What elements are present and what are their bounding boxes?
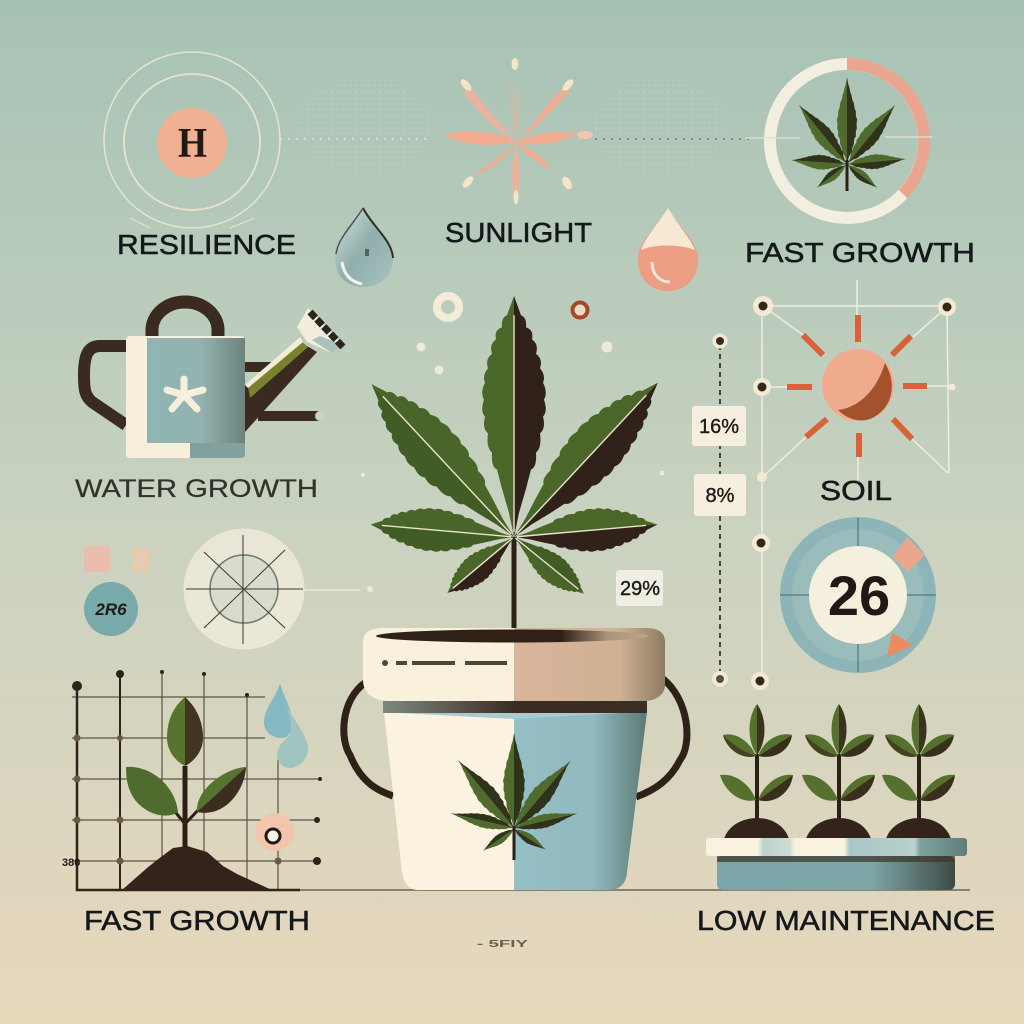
icon: resilience circle: [104, 52, 432, 228]
chart: growth grid with seedling: [62, 670, 322, 890]
label: fast growth bottom: FAST GROWTH: [84, 905, 310, 936]
callout: center 29%: 29%: [620, 578, 660, 600]
pot body: [383, 701, 647, 890]
icon: leaf in circle: [745, 64, 932, 218]
footer faint text: - 5FIY: [477, 939, 529, 950]
label: resilience: RESILIENCE: [117, 229, 296, 260]
chart: growth grid with seedling: 380: [62, 857, 80, 869]
icon: sunlight burst: [443, 58, 755, 204]
icon: resilience circle: H: [178, 121, 207, 167]
label: water growth: WATER GROWTH: [75, 475, 318, 503]
icon: faded squares: [84, 546, 150, 572]
icon: soil sun network: [751, 280, 956, 690]
icon: watering can: [84, 302, 343, 458]
callout: percentage scale: 8%: [706, 485, 735, 507]
label: sunlight: SUNLIGHT: [445, 217, 592, 248]
callout: percentage scale: [692, 334, 746, 687]
icon: can star: [167, 379, 203, 409]
callout: center 29%: [616, 570, 663, 606]
ground line: [300, 889, 970, 891]
seedlings tray: [706, 704, 967, 890]
small decorative circles: [361, 296, 664, 592]
icon: teal badge: [84, 582, 138, 636]
decorative dotted patches: [299, 75, 726, 175]
icon: compass wheel: [185, 530, 360, 648]
callout: percentage scale: 16%: [699, 416, 739, 438]
chart: donut 26: 26: [828, 564, 890, 627]
icon: right water drop: [638, 208, 698, 291]
pot rim: [363, 628, 665, 701]
label: soil: SOIL: [820, 475, 892, 506]
label: fast growth top: FAST GROWTH: [745, 237, 975, 268]
pot handles: [344, 678, 687, 797]
main plant pot: [344, 628, 687, 890]
chart: donut 26: [780, 517, 936, 673]
icon: left water drop: [335, 208, 393, 287]
main plant: large leaf: [352, 296, 678, 630]
label: low maintenance: LOW MAINTENANCE: [697, 905, 995, 936]
pot leaf emblem: [449, 733, 579, 860]
icon: teal badge: 2R6: [94, 600, 127, 619]
